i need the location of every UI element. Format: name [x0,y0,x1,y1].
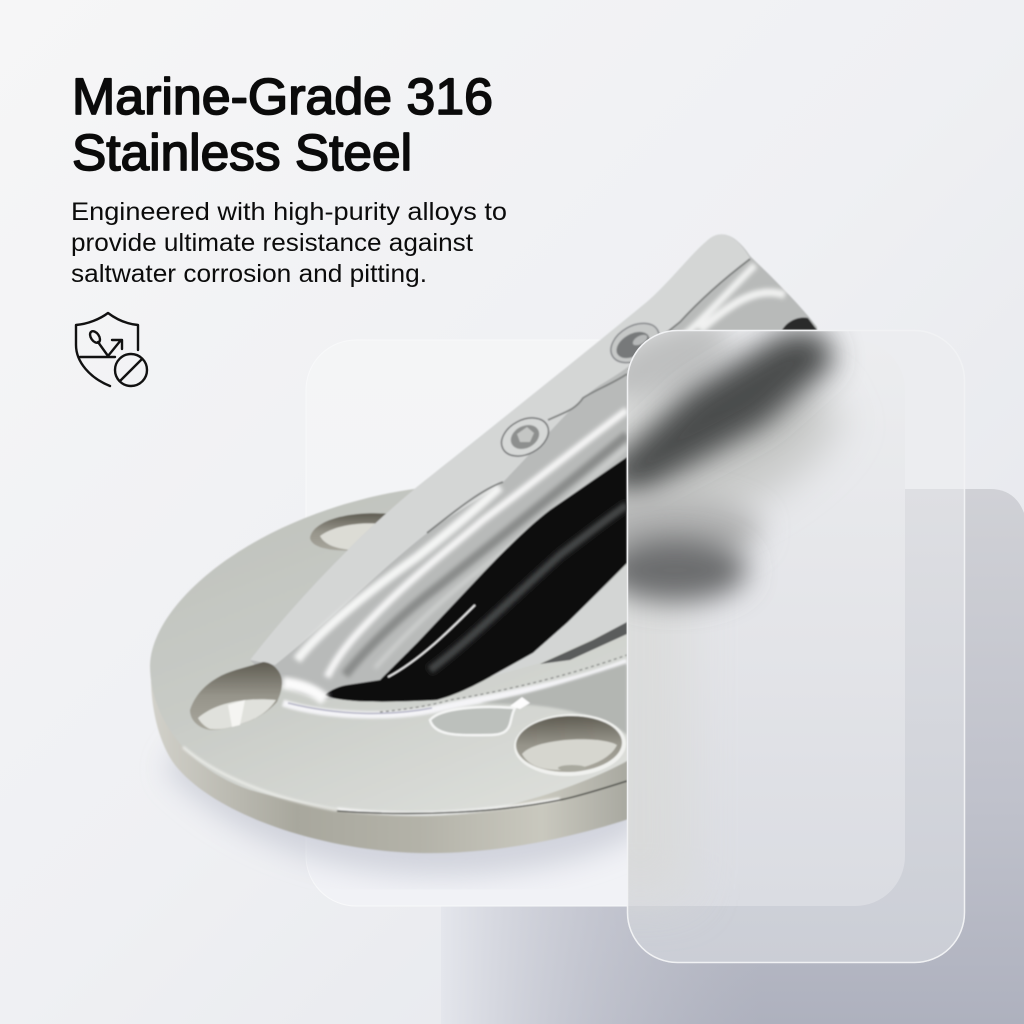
black reflection band [325,457,627,702]
dark wedge reflection [540,622,627,664]
plate reflection pool [430,707,515,735]
lower screw [495,410,555,464]
panel: front frosted glass card [626,330,966,964]
tube stripes [297,265,785,677]
frosted middle card tint [628,340,905,906]
top screw hole [310,513,392,551]
title: Stainless Steel [72,124,412,181]
weld seam lines [427,259,750,533]
tube body [250,234,820,700]
frosted back card tint [628,489,964,962]
icon: shield with corrosion symbol [76,313,147,386]
plate rim highlight [183,747,627,814]
frosted metal haze [628,386,847,514]
weld hot spot [510,697,530,709]
plate side wall [151,670,660,853]
plate shadow [165,720,650,876]
title: Marine-Grade 316 [72,68,493,125]
description text: provide ultimate resistance against [71,229,473,257]
band grey reflections [388,505,627,677]
title [72,68,493,181]
description text: saltwater corrosion and pitting. [71,260,427,288]
frosted lower blob blur [603,538,747,602]
frosted dark band blur [595,332,836,492]
description text: Engineered with high-purity alloys to [71,198,507,226]
plate reflection right of tube [480,663,627,735]
panel: middle translucent card [306,340,905,906]
dark tip strip [782,318,817,330]
description text [71,198,507,288]
right screw hole [513,712,627,778]
plate top face [150,486,720,816]
left screw hole [190,662,282,730]
base weld highlight [283,655,627,715]
product photo: stainless steel pad eye [150,234,820,876]
frosted left metal tint [628,396,681,868]
tube shoulder [250,234,750,665]
frosted top-left corner grey [628,331,738,408]
frosted lower blob haze [600,500,760,560]
panel: back grey card [441,489,1024,1024]
tube base reflection wedge [490,565,627,677]
upper screw [604,315,666,371]
